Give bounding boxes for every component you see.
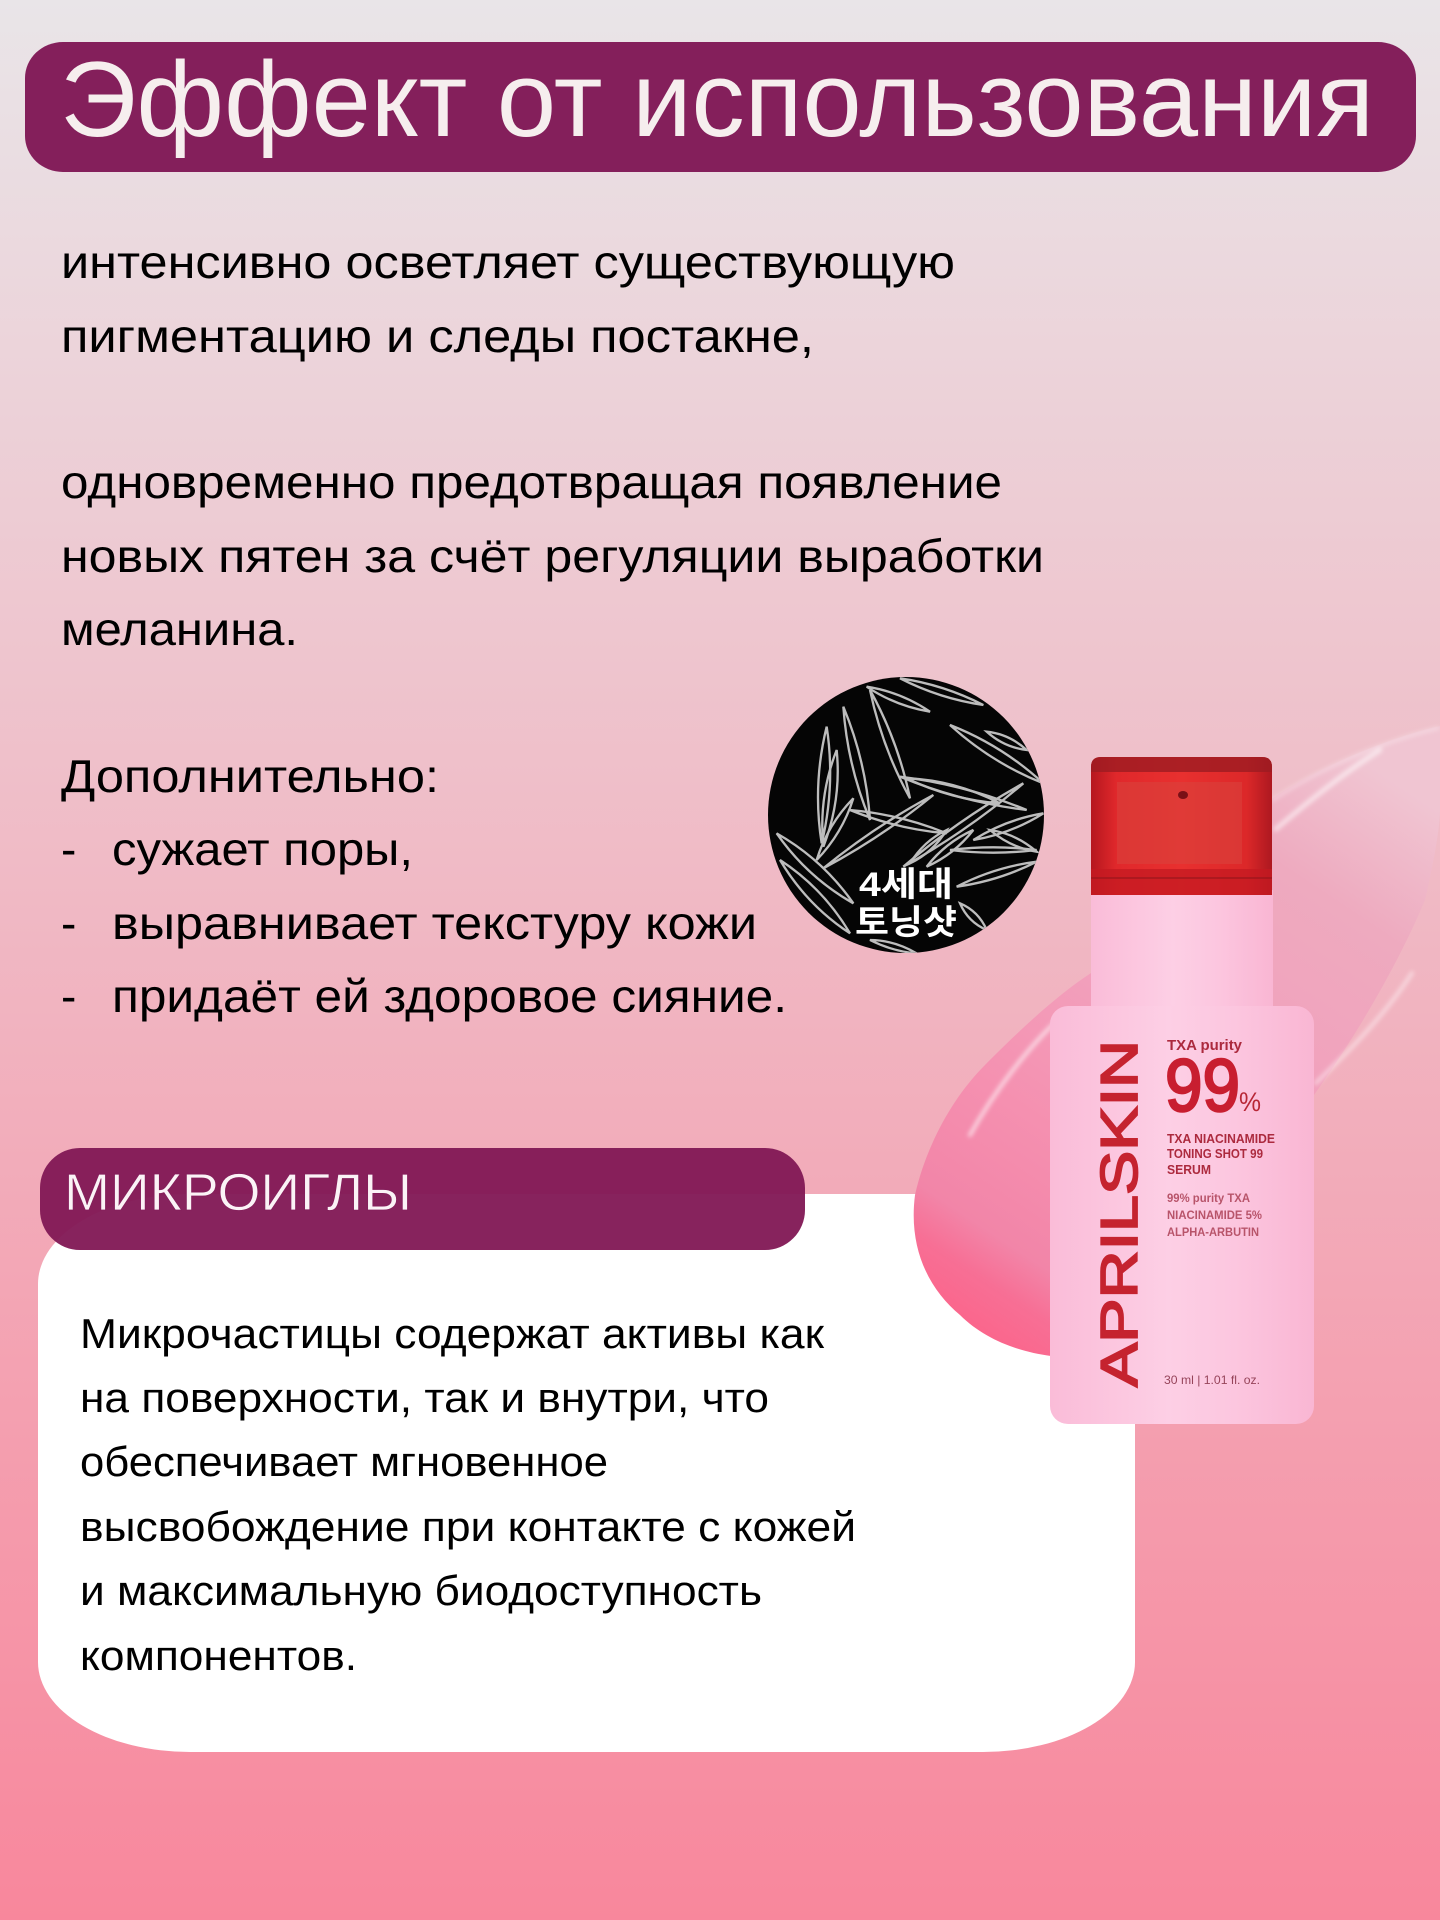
additional benefits list: - — [61, 897, 76, 949]
bottle label text — [1164, 1037, 1275, 1387]
intro text block — [61, 236, 1044, 655]
intro text block: меланина. — [61, 603, 298, 655]
bottle label text: % — [1239, 1087, 1261, 1117]
additional benefits list: сужает поры, — [112, 823, 413, 875]
bottle body — [1050, 1006, 1314, 1424]
panel body text: Микрочастицы содержат активы как — [80, 1310, 825, 1357]
intro text block: одновременно предотвращая появление — [61, 456, 1002, 508]
bottle label text: TXA purity — [1167, 1037, 1243, 1054]
additional benefits list — [61, 750, 787, 1022]
bottle label text: SERUM — [1167, 1163, 1211, 1177]
panel body text: на поверхности, так и внутри, что — [80, 1374, 769, 1421]
product bottle — [1050, 757, 1314, 1424]
intro text block: интенсивно осветляет существующую — [61, 236, 955, 288]
bottle red cap — [1091, 757, 1272, 895]
panel body text — [80, 1310, 856, 1679]
bottle neck — [1091, 890, 1273, 1015]
additional benefits list: - — [61, 823, 76, 875]
bottle label text: TXA NIACINAMIDE — [1167, 1132, 1275, 1146]
micrograph caption — [855, 866, 957, 942]
bottle label text: 30 ml | 1.01 fl. oz. — [1164, 1373, 1260, 1387]
additional benefits list: Дополнительно: — [61, 750, 439, 802]
white microneedles panel — [38, 1194, 1135, 1752]
additional benefits list: придаёт ей здоровое сияние. — [112, 970, 787, 1022]
section heading text: МИКРОИГЛЫ — [64, 1164, 412, 1222]
panel body text: и максимальную биодоступность — [80, 1567, 762, 1614]
brand name: APRILSKIN — [1091, 1040, 1149, 1387]
serum swatch — [914, 726, 1440, 1356]
title text: Эффект от использования — [60, 39, 1374, 159]
additional benefits list: выравнивает текстуру кожи — [112, 897, 757, 949]
title banner — [25, 39, 1416, 172]
panel body text: высвобождение при контакте с кожей — [80, 1503, 856, 1550]
panel body text: компонентов. — [80, 1632, 357, 1679]
intro text block: новых пятен за счёт регуляции выработки — [61, 530, 1044, 582]
bottle label text: 99% purity TXA — [1167, 1193, 1250, 1205]
intro text block: пигментацию и следы постакне, — [61, 310, 814, 362]
microneedle micrograph circle — [768, 677, 1044, 953]
micrograph caption: 토닝샷 — [855, 904, 957, 942]
additional benefits list: - — [61, 970, 76, 1022]
bottle label text: NIACINAMIDE 5% — [1167, 1210, 1262, 1222]
bottle label text: ALPHA-ARBUTIN — [1167, 1227, 1259, 1239]
section heading pill — [40, 1148, 805, 1250]
panel body text: обеспечивает мгновенное — [80, 1438, 608, 1485]
bottle label text: TONING SHOT 99 — [1167, 1147, 1263, 1161]
micrograph caption: 4세대 — [859, 866, 953, 904]
bottle label text: 99 — [1165, 1044, 1240, 1127]
